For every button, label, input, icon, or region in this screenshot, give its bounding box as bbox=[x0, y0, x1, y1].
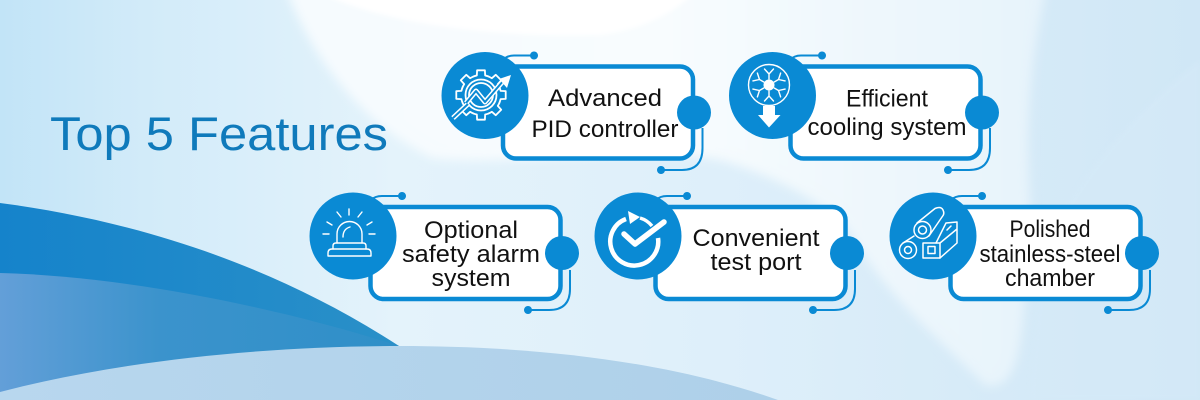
label line 2: stainless-steel bbox=[980, 241, 1120, 268]
label line 3: system bbox=[432, 265, 510, 292]
label: Optional bbox=[424, 217, 518, 244]
connector dots bbox=[530, 52, 665, 174]
connector wires bbox=[656, 196, 855, 310]
label: Polished bbox=[1010, 216, 1090, 243]
text box bbox=[656, 207, 846, 299]
connector wires bbox=[790, 56, 990, 170]
title: Top 5 Features bbox=[50, 107, 388, 160]
label line 2: cooling system bbox=[808, 114, 966, 141]
card: Convenient test port bbox=[594, 192, 864, 314]
icon: metal rolls and bar bbox=[900, 208, 957, 258]
label: Convenient bbox=[692, 225, 820, 252]
label: Efficient bbox=[846, 86, 928, 112]
decorative wave: dark blue bbox=[0, 203, 399, 346]
connector dots bbox=[978, 192, 1112, 314]
side node bbox=[830, 236, 864, 270]
text box bbox=[370, 207, 560, 299]
label line 3: chamber bbox=[1005, 265, 1095, 292]
decorative wave: mid blue bbox=[0, 273, 399, 400]
icon circle bbox=[310, 192, 396, 280]
icon: check with cycle arrow bbox=[610, 211, 664, 266]
icon circle bbox=[442, 52, 528, 139]
connector dots bbox=[683, 192, 817, 314]
connector wires bbox=[503, 56, 702, 170]
connector wires bbox=[371, 196, 570, 310]
icon: gear with growth arrow bbox=[453, 70, 511, 120]
decorative wave: pale blue bbox=[0, 346, 778, 400]
icon: fan with down arrow bbox=[748, 64, 790, 128]
side node bbox=[545, 236, 579, 270]
connector dots bbox=[398, 192, 532, 314]
text box bbox=[950, 207, 1140, 299]
card: Polished stainless-steel chamber bbox=[890, 192, 1159, 314]
side node bbox=[677, 96, 711, 130]
label line 2: safety alarm bbox=[402, 241, 540, 268]
icon circle bbox=[729, 52, 816, 139]
card: Efficient cooling system bbox=[729, 52, 999, 174]
icon circle bbox=[890, 192, 976, 280]
connector dots bbox=[818, 52, 952, 174]
label line 2: test port bbox=[710, 249, 802, 276]
connector wires bbox=[951, 196, 1150, 310]
label: Advanced bbox=[548, 85, 662, 112]
side node bbox=[1125, 236, 1159, 270]
icon: alarm beacon bbox=[323, 209, 375, 256]
card: Optional safety alarm system bbox=[310, 192, 579, 314]
icon circle bbox=[594, 192, 682, 280]
text box bbox=[503, 66, 693, 158]
text box bbox=[790, 66, 980, 158]
card: Advanced PID controller bbox=[442, 52, 711, 174]
side node bbox=[965, 96, 999, 130]
label line 2: PID controller bbox=[532, 116, 678, 143]
